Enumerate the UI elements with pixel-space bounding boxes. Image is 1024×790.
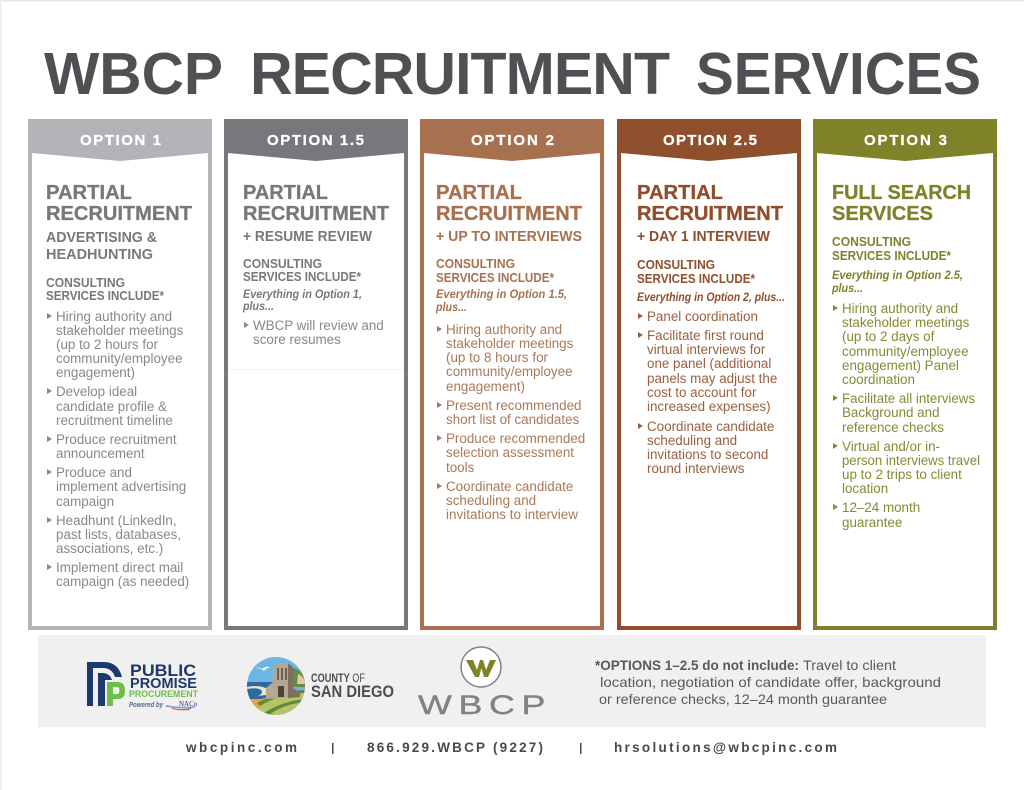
panel frame: option 2.5 <box>617 119 801 630</box>
panel: option 2 <box>420 119 604 630</box>
title <box>44 41 981 107</box>
logo: County of San Diego <box>247 657 394 716</box>
bullet list: option 3: location <box>842 481 888 496</box>
heading: option 2.5: RECRUITMENT <box>637 202 783 225</box>
bullet list: option 1: past lists, databases, <box>56 527 181 542</box>
panel: option 3 <box>813 119 997 630</box>
bullet list: option 2: Coordinate candidate <box>446 479 573 494</box>
bullet list: option 1: Produce and <box>56 465 132 480</box>
bullet list: option 2.5 <box>638 309 777 476</box>
consulting label: option 3: CONSULTING <box>832 234 911 249</box>
logo: County of San Diego: COUNTY OF <box>311 673 365 685</box>
logo: Public Promise Procurement: PROCUREMENT <box>129 689 198 700</box>
panel: option 2.5 <box>617 119 801 630</box>
heading: option 2: PARTIAL <box>436 181 522 204</box>
consulting label: option 2: CONSULTING <box>436 256 515 271</box>
consulting label: option 2 <box>436 256 555 285</box>
bullet list: option 2: short list of candidates <box>446 412 580 427</box>
bullet list: option 2: engagement) <box>446 379 525 394</box>
subheading: option 2: + UP TO INTERVIEWS <box>436 229 582 245</box>
logo: Public Promise Procurement: Powered by <box>129 700 164 709</box>
consulting label: option 1: CONSULTING <box>46 275 125 290</box>
footnote <box>595 657 941 707</box>
bullet list: option 2.5: panels may adjust the <box>647 371 777 386</box>
panel frame: option 1.5 <box>224 119 408 630</box>
bullet list: option 2: stakeholder meetings <box>446 336 574 351</box>
bullet list: option 2: (up to 8 hours for <box>446 350 549 365</box>
bullet list: option 2.5: increased expenses) <box>647 399 771 414</box>
logo: Public Promise Procurement: PROMISE <box>130 675 197 692</box>
bullet list: option 3: Background and <box>842 405 940 420</box>
bullet list: option 1.5 <box>244 318 384 347</box>
panel frame: option 1 <box>28 119 212 630</box>
subheading: option 1 <box>46 230 157 263</box>
bullet list: option 1: announcement <box>56 446 145 461</box>
subheading: option 1.5: + RESUME REVIEW <box>243 229 372 245</box>
panel frame: option 3 <box>813 119 997 630</box>
panel frame: option 2 <box>420 119 604 630</box>
bullet list: option 2: selection assessment <box>446 445 574 460</box>
carry-over note: option 3: plus... <box>831 281 863 295</box>
bullet list: option 3: stakeholder meetings <box>842 315 970 330</box>
bullet list: option 1 <box>47 309 189 589</box>
bullet list: option 2: tools <box>446 460 475 475</box>
bullet list: option 3: coordination <box>842 372 915 387</box>
consulting label: option 1.5: SERVICES INCLUDE* <box>243 269 362 284</box>
heading: option 3 <box>832 181 971 225</box>
heading: option 3: SERVICES <box>832 202 933 225</box>
title: RECRUITMENT <box>250 41 670 107</box>
consulting label: option 1 <box>46 275 165 303</box>
bullet list: option 1: campaign <box>56 494 114 509</box>
consulting label: option 2: SERVICES INCLUDE* <box>436 270 555 285</box>
bullet list: option 3: up to 2 trips to client <box>842 467 962 482</box>
bullet list: option 3: Hiring authority and <box>842 301 958 316</box>
contact line: hrsolutions@wbcpinc.com <box>614 740 837 755</box>
bullet list: option 2.5: Coordinate candidate <box>647 419 774 434</box>
bullet list: option 1: Develop ideal <box>56 384 137 399</box>
logo: WBCP: WBCP <box>418 690 552 720</box>
heading: option 1.5 <box>243 181 389 225</box>
option 1.5 label: OPTION 1.5 <box>267 132 364 149</box>
bullet list: option 1: community/employee <box>56 351 183 366</box>
heading: option 2.5 <box>637 181 783 225</box>
logo: Public Promise Procurement: NACo <box>179 700 198 708</box>
carry-over note: option 2.5: Everything in Option 2, plus... <box>637 290 785 304</box>
consulting label: option 1: SERVICES INCLUDE* <box>46 288 165 303</box>
bullet list: option 3: guarantee <box>842 515 902 530</box>
panel: option 1 <box>28 119 212 630</box>
contact line: wbcpinc.com <box>185 740 297 755</box>
option 2 label: OPTION 2 <box>471 132 554 149</box>
footnote: or reference checks, 12–24 month guarantee <box>599 691 887 707</box>
contact line <box>185 740 837 755</box>
heading: option 1 <box>46 181 192 225</box>
subheading: option 1: ADVERTISING & <box>46 230 157 246</box>
title: WBCP <box>44 41 223 107</box>
heading: option 2.5: PARTIAL <box>637 181 723 204</box>
bullet list: option 3: 12–24 month <box>842 500 920 515</box>
carry-over note: option 1.5: plus... <box>242 299 274 313</box>
bullet list: option 2: Present recommended <box>446 398 581 413</box>
carry-over note: option 3 <box>831 268 963 295</box>
bullet list: option 3: reference checks <box>842 420 944 435</box>
consulting label: option 2.5: CONSULTING <box>637 257 715 272</box>
consulting label: option 3: SERVICES INCLUDE* <box>832 248 952 263</box>
heading: option 2: RECRUITMENT <box>436 202 582 225</box>
subheading: option 1: HEADHUNTING <box>46 247 153 263</box>
bullet list: option 2: community/employee <box>446 364 573 379</box>
footnote: location, negotiation of candidate offer, background <box>600 674 941 690</box>
footer band <box>38 635 986 727</box>
panel: option 1.5 <box>224 119 408 630</box>
consulting label: option 3 <box>832 234 952 263</box>
heading: option 1.5: RECRUITMENT <box>243 202 389 225</box>
subheading: option 2.5: + DAY 1 INTERVIEW <box>637 229 770 245</box>
bullet list: option 1: Implement direct mail <box>56 560 183 575</box>
bullet list: option 1: candidate profile & <box>56 399 167 414</box>
bullet list: option 2.5: Facilitate first round <box>647 328 764 343</box>
bullet list: option 1.5: WBCP will review and <box>253 318 384 333</box>
bullet list: option 2: scheduling and <box>446 493 536 508</box>
heading: option 1.5: PARTIAL <box>243 181 328 204</box>
footnote: Travel to client <box>803 657 896 673</box>
bullet list: option 3: Facilitate all interviews <box>842 391 975 406</box>
carry-over note: option 1.5 <box>242 287 362 313</box>
option 1 label: OPTION 1 <box>80 132 161 149</box>
heading: option 3: FULL SEARCH <box>832 181 971 204</box>
bullet list: option 2.5: one panel (additional <box>647 356 771 371</box>
bullet list: option 2: Hiring authority and <box>446 322 562 337</box>
carry-over note: option 2: plus... <box>435 300 467 314</box>
consulting label: option 2.5 <box>637 257 756 286</box>
footnote: *OPTIONS 1–2.5 do not include: <box>595 657 799 673</box>
title: SERVICES <box>696 41 981 107</box>
carry-over note: option 2 <box>435 287 567 314</box>
bullet list: option 2.5: invitations to second <box>647 447 768 462</box>
heading: option 1: PARTIAL <box>46 181 132 204</box>
bullet list: option 3: Virtual and/or in- <box>842 439 940 454</box>
logo: WBCP <box>418 647 552 720</box>
bullet list: option 1: engagement) <box>56 365 135 380</box>
bullet list: option 1: stakeholder meetings <box>56 323 184 338</box>
logo: County of San Diego: SAN DIEGO <box>311 682 394 701</box>
bullet list: option 3: community/employee <box>842 344 969 359</box>
bullet list: option 2.5: cost to account for <box>647 385 757 400</box>
option 2.5 label: OPTION 2.5 <box>663 132 757 149</box>
bullet list: option 2.5: Panel coordination <box>647 309 758 324</box>
bullet list: option 2: invitations to interview <box>446 507 578 522</box>
bullet list: option 2: Produce recommended <box>446 431 585 446</box>
bullet list: option 1: recruitment timeline <box>56 413 173 428</box>
carry-over note: option 1.5: Everything in Option 1, <box>243 287 362 301</box>
bullet list: option 2 <box>437 322 585 522</box>
bullet list: option 1: (up to 2 hours for <box>56 337 159 352</box>
bullet list: option 3: (up to 2 days of <box>842 329 935 344</box>
logo: Public Promise Procurement <box>87 661 198 710</box>
option 3 label: OPTION 3 <box>864 132 947 149</box>
carry-over note: option 2: Everything in Option 1.5, <box>436 287 567 301</box>
bullet list: option 1: Headhunt (LinkedIn, <box>56 513 177 528</box>
consulting label: option 1.5 <box>243 256 362 284</box>
heading: option 1: RECRUITMENT <box>46 202 192 225</box>
bullet list: option 1.5: score resumes <box>253 332 341 347</box>
bullet list: option 3: person interviews travel <box>842 453 980 468</box>
consulting label: option 1.5: CONSULTING <box>243 256 322 271</box>
logo: Public Promise Procurement: PUBLIC <box>130 661 196 680</box>
bullet list: option 1: campaign (as needed) <box>56 574 189 589</box>
heading: option 2 <box>436 181 582 225</box>
bullet list: option 1: implement advertising <box>56 479 186 494</box>
carry-over note: option 3: Everything in Option 2.5, <box>832 268 963 282</box>
bullet list: option 3 <box>833 301 980 530</box>
bullet list: option 2.5: round interviews <box>647 461 745 476</box>
contact line: 866.929.WBCP (9227) <box>367 740 543 755</box>
bullet list: option 1: Hiring authority and <box>56 309 172 324</box>
bullet list: option 2.5: virtual interviews for <box>647 342 766 357</box>
bullet list: option 2.5: scheduling and <box>647 433 737 448</box>
consulting label: option 2.5: SERVICES INCLUDE* <box>637 271 756 286</box>
bullet list: option 3: engagement) Panel <box>842 358 959 373</box>
bullet list: option 1: Produce recruitment <box>56 432 177 447</box>
bullet list: option 1: associations, etc.) <box>56 541 163 556</box>
